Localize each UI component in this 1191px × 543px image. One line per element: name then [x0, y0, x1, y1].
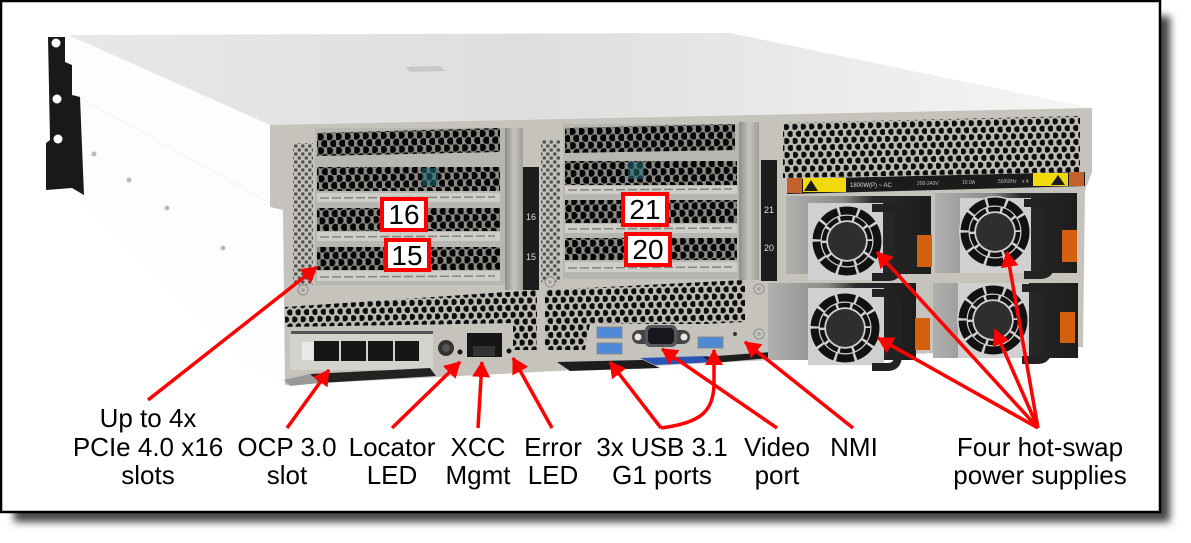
PCIe slot label strip left [523, 167, 539, 290]
arrows: USB ports [610, 350, 714, 428]
label: USB ports: G1 ports [612, 460, 712, 490]
power supply bottom right [933, 283, 1078, 360]
PCIe cage left: slots 15 and 16 [315, 128, 523, 290]
slot number 21: 21 [629, 194, 661, 225]
PCIe slot label strip right: 20 [764, 243, 774, 253]
arrow: NMI [745, 342, 853, 428]
arrow: OCP slot [287, 370, 329, 428]
label: locator LED: Locator [349, 432, 436, 462]
label: OCP slot: OCP 3.0 [237, 432, 337, 462]
label: locator LED: LED [367, 460, 417, 490]
label: error LED: LED [528, 460, 578, 490]
power supply top left [786, 196, 932, 280]
power rating label strip: 10.0A [962, 180, 976, 186]
PCIe slot label strip right [761, 160, 777, 281]
label: power supplies: power supplies [953, 460, 1127, 490]
center vent column [541, 140, 560, 282]
slot number 20: 20 [632, 234, 664, 265]
label: OCP slot: slot [267, 460, 308, 490]
label: NMI: NMI [830, 432, 878, 462]
label: power supplies: Four hot-swap [957, 432, 1123, 462]
arrows: power supplies [877, 252, 1038, 428]
slot number 16: 16 [388, 199, 420, 230]
power rating label strip: x 4 [1022, 179, 1029, 185]
top cover logo [405, 66, 446, 72]
lower left vent [285, 290, 537, 350]
label: USB ports: 3x USB 3.1 [596, 432, 728, 462]
PCIe slot label strip right: 21 [764, 205, 774, 215]
server chassis [46, 33, 1092, 386]
label: PCIe slots: Up to 4x [100, 403, 196, 433]
error LED [506, 348, 512, 354]
label: error LED: Error [524, 432, 582, 462]
PCIe slot label strip left: 15 [526, 252, 536, 262]
USB ports [597, 327, 723, 354]
XCC management port [467, 333, 502, 357]
power supply top right [935, 193, 1077, 275]
label: PCIe slots: PCIe 4.0 x16 [73, 432, 223, 462]
VGA video port [632, 325, 690, 347]
upper right vent [783, 116, 1080, 178]
chassis top cover [68, 33, 1092, 125]
chassis side [68, 36, 284, 382]
label: XCC management: Mgmt [446, 460, 511, 490]
arrow: locator LED [392, 362, 460, 428]
bottom label bars [284, 352, 772, 386]
rack ear [46, 37, 84, 195]
power supply bottom left [768, 283, 930, 367]
label: PCIe slots: slots [121, 460, 175, 490]
arrow: error LED [513, 358, 552, 428]
arrow: XCC management [478, 362, 482, 428]
power rating label strip: 1800W(P) ~ AC [850, 183, 893, 189]
label: video port: port [755, 460, 800, 490]
label: XCC management: XCC [451, 432, 505, 462]
PCIe slot label strip left: 16 [526, 212, 536, 222]
lower right vent [545, 280, 745, 350]
panel screws [298, 277, 764, 339]
slot number 15: 15 [391, 240, 423, 271]
power rating label strip: 200-240V [917, 181, 939, 187]
left vent column [293, 143, 313, 285]
label: video port: Video [744, 432, 810, 462]
arrow: PCIe slots [148, 267, 317, 400]
OCP 3.0 card [290, 331, 436, 383]
power rating label strip [787, 172, 1085, 194]
power rating label strip: 50/60Hz [998, 179, 1017, 185]
rear panel [270, 108, 1092, 385]
locator LED button [438, 340, 462, 356]
PCIe cage right: slots 20 and 21 [563, 122, 759, 280]
NMI button [733, 332, 737, 336]
arrow: video port [662, 349, 777, 428]
